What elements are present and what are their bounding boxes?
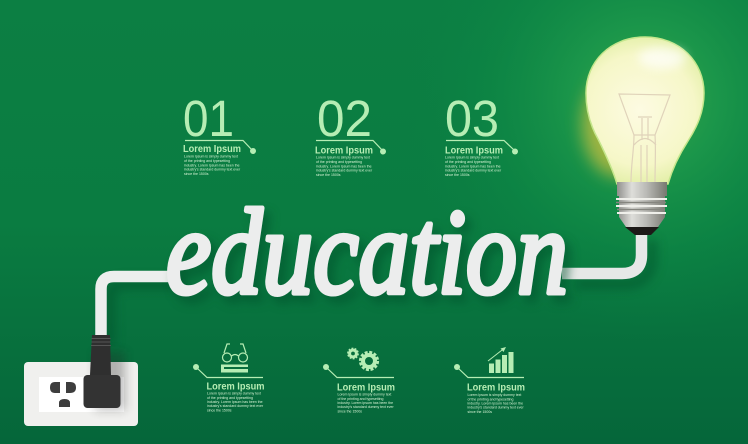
body text 05: industry's standard dummy text ever [338,405,394,409]
power socket [24,362,138,426]
word shadow: education [172,192,574,327]
icon: glasses on books [221,344,248,372]
number 03: 03 [445,90,499,147]
step 05 [323,349,395,414]
step 01 [183,90,256,176]
body text 04: Lorem Ipsum is simply dummy text [207,392,261,396]
body text 05: of the printing and typesetting [338,397,383,401]
heading 05: Lorem Ipsum [337,382,395,394]
filament [619,94,670,182]
socket plate [24,362,138,426]
body text 01: Lorem Ipsum is simply dummy text [184,154,238,158]
word: education: education [166,185,568,320]
connector line 01 [185,140,256,154]
plug [84,335,120,408]
heading 01: Lorem Ipsum [183,144,241,155]
body text 03: of the printing and typesetting [445,160,491,164]
step 03 [445,90,518,177]
body text 04: since the 1500s [207,408,232,412]
light bulb [582,37,704,235]
number 01: 01 [183,90,234,147]
heading 02: Lorem Ipsum [315,146,373,156]
body text 02: industry's standard dummy text ever [316,169,373,173]
connector line 02 [316,140,386,154]
body text 02: of the printing and typesetting [316,160,362,164]
body text 03: Lorem Ipsum is simply dummy text [445,156,499,160]
step 04 [193,344,264,412]
step 02 [315,90,386,177]
plug collar [90,335,111,375]
body text 01: since the 1500s [184,172,209,176]
plug body [84,375,120,408]
socket holes [50,382,76,407]
connector line 05 [323,364,394,378]
bulb halo [582,73,654,177]
cord shadow [110,240,652,345]
connector line 03 [446,140,518,154]
body text 01: industry's standard dummy text ever [184,168,241,172]
connector line 06 [454,364,524,378]
icon: gears [348,349,378,370]
body text 03: industry. Lorem Ipsum has been the [445,164,501,168]
power cord left [101,276,176,340]
connector line 04 [193,364,263,378]
body text 06: industry's standard dummy text ever [468,406,524,410]
body text 05: industry. Lorem Ipsum has been the [338,401,393,405]
body text 05: since the 1500s [338,410,362,414]
body text 06: industry. Lorem Ipsum has been the [468,402,523,406]
body text 06: since the 1500s [468,410,492,414]
body text 04: industry's standard dummy text ever [207,404,264,408]
power cord right [562,232,642,274]
body text 01: of the printing and typesetting [184,159,230,163]
heading 06: Lorem Ipsum [467,382,525,394]
body text 04: industry. Lorem Ipsum has been the [207,400,263,404]
number 02: 02 [317,90,372,147]
body text 01: industry. Lorem Ipsum has been the [184,163,240,167]
heading 04: Lorem Ipsum [206,382,264,392]
body text 03: industry's standard dummy text ever [445,169,502,173]
body text 02: industry. Lorem Ipsum has been the [316,164,372,168]
bulb tip [625,227,659,235]
socket face [39,377,124,412]
body text 06: of the printing and typesetting [468,397,513,401]
body text 05: Lorem Ipsum is simply dummy text [338,392,391,396]
body text 04: of the printing and typesetting [207,396,253,400]
step 06 [454,347,525,414]
plug grooves [91,338,111,346]
heading 03: Lorem Ipsum [445,146,503,156]
body text 02: Lorem Ipsum is simply dummy text [316,156,370,160]
icon: rising bar chart [488,347,514,373]
bulb highlight [638,47,686,69]
body text 02: since the 1500s [316,173,341,177]
plug shadow [95,352,125,410]
body text 03: since the 1500s [445,173,470,177]
bulb glass [586,37,704,184]
metal base [616,182,667,227]
body text 06: Lorem Ipsum is simply dummy text [468,393,521,397]
